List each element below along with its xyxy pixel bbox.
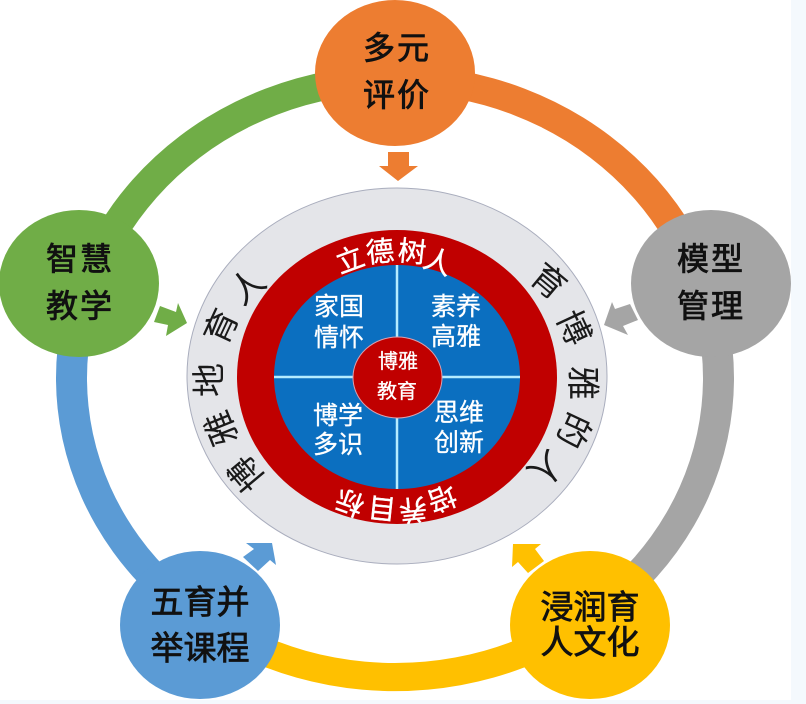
quadrant text: 思维创新: 思维 — [434, 399, 484, 427]
outer gray disc — [187, 188, 607, 564]
node: 模型管理: 管理 — [677, 288, 745, 324]
node: 智慧教学: 智慧 — [46, 241, 114, 277]
quadrant text: 素养高雅: 高雅 — [431, 323, 481, 351]
quadrant text: 博学多识: 博学 — [313, 402, 363, 430]
node: 智慧教学 — [0, 210, 159, 357]
center text — [377, 350, 418, 403]
band text: 培养目标: 标 — [332, 483, 368, 521]
band text: 立德树人 — [332, 235, 456, 281]
node: 模型管理: 模型 — [677, 241, 745, 277]
node: 浸润育人文化 — [510, 551, 670, 699]
ring arc: green — [106, 74, 322, 229]
quadrant dividers — [274, 265, 520, 489]
quadrant text: 素养高雅: 素养 — [431, 293, 481, 321]
node: 浸润育人文化: 人文化 — [540, 624, 640, 660]
ring arc: gray — [630, 354, 734, 580]
ring text: 博雅地育人: 人 — [223, 262, 273, 312]
quadrant text: 家国情怀: 家国 — [314, 293, 364, 321]
quadrant text: 思维创新: 创新 — [434, 429, 484, 457]
arrow: orange down — [379, 152, 418, 181]
arrow: green right — [154, 303, 187, 336]
band text: 培养目标: 养 — [397, 492, 429, 526]
node: 多元评价: 评价 — [363, 77, 431, 113]
node: 智慧教学: 教学 — [46, 288, 114, 324]
arrow: yellow up-left — [512, 544, 544, 573]
center circle — [353, 337, 442, 418]
ring text: 育博雅的人: 博 — [549, 305, 597, 351]
quadrant text: 素养高雅 — [431, 293, 481, 351]
node: 五育并举课程: 举课程 — [150, 630, 250, 666]
band text: 立德树人: 树 — [396, 235, 428, 269]
ring text: 育博雅的人: 人 — [520, 443, 570, 493]
band text: 立德树人: 德 — [364, 235, 396, 269]
red band — [237, 230, 557, 524]
node: 五育并举课程: 五育并 — [150, 584, 250, 620]
ring arc: blue — [56, 354, 160, 580]
ring text: 博雅地育人: 博 — [222, 448, 272, 498]
band text: 培养目标: 目 — [366, 491, 398, 525]
ring arc: orange — [468, 74, 684, 229]
band text: 立德树人: 立 — [332, 241, 368, 279]
band text: 培养目标 — [332, 479, 460, 526]
node: 模型管理 — [631, 210, 791, 357]
blue quadrant disc — [274, 265, 520, 489]
center text: 教育 — [377, 380, 417, 403]
node: 浸润育人文化: 浸润育 — [540, 588, 640, 626]
ring text: 育博雅的人: 育 — [523, 257, 573, 307]
ring text: 博雅地育人: 雅 — [198, 405, 246, 451]
quadrant text: 博学多识: 多识 — [313, 431, 363, 459]
ring arc: yellow — [266, 642, 524, 692]
arrow: gray left — [604, 302, 638, 335]
node: 五育并举课程 — [120, 551, 280, 699]
quadrant text: 思维创新 — [434, 399, 484, 457]
ring text: 育博雅的人: 雅 — [563, 366, 601, 400]
ring text: 博雅地育人 — [191, 262, 273, 498]
outer cycle ring — [56, 65, 734, 691]
ring text: 育博雅的人 — [520, 257, 601, 493]
ring text: 育博雅的人: 的 — [549, 407, 597, 453]
center text: 博雅 — [378, 350, 418, 373]
ring text: 博雅地育人: 地 — [191, 363, 229, 397]
band text: 立德树人: 人 — [420, 243, 456, 281]
node: 多元评价: 多元 — [363, 30, 431, 66]
central circle diagram — [187, 188, 607, 564]
quadrant text: 家国情怀: 情怀 — [314, 324, 364, 352]
arrow: blue up-right — [243, 543, 276, 571]
node: 多元评价 — [315, 0, 475, 146]
ring text: 博雅地育人: 育 — [198, 304, 246, 350]
band text: 培养目标: 培 — [424, 479, 460, 517]
quadrant text: 家国情怀 — [314, 293, 364, 352]
quadrant text: 博学多识 — [313, 402, 363, 459]
